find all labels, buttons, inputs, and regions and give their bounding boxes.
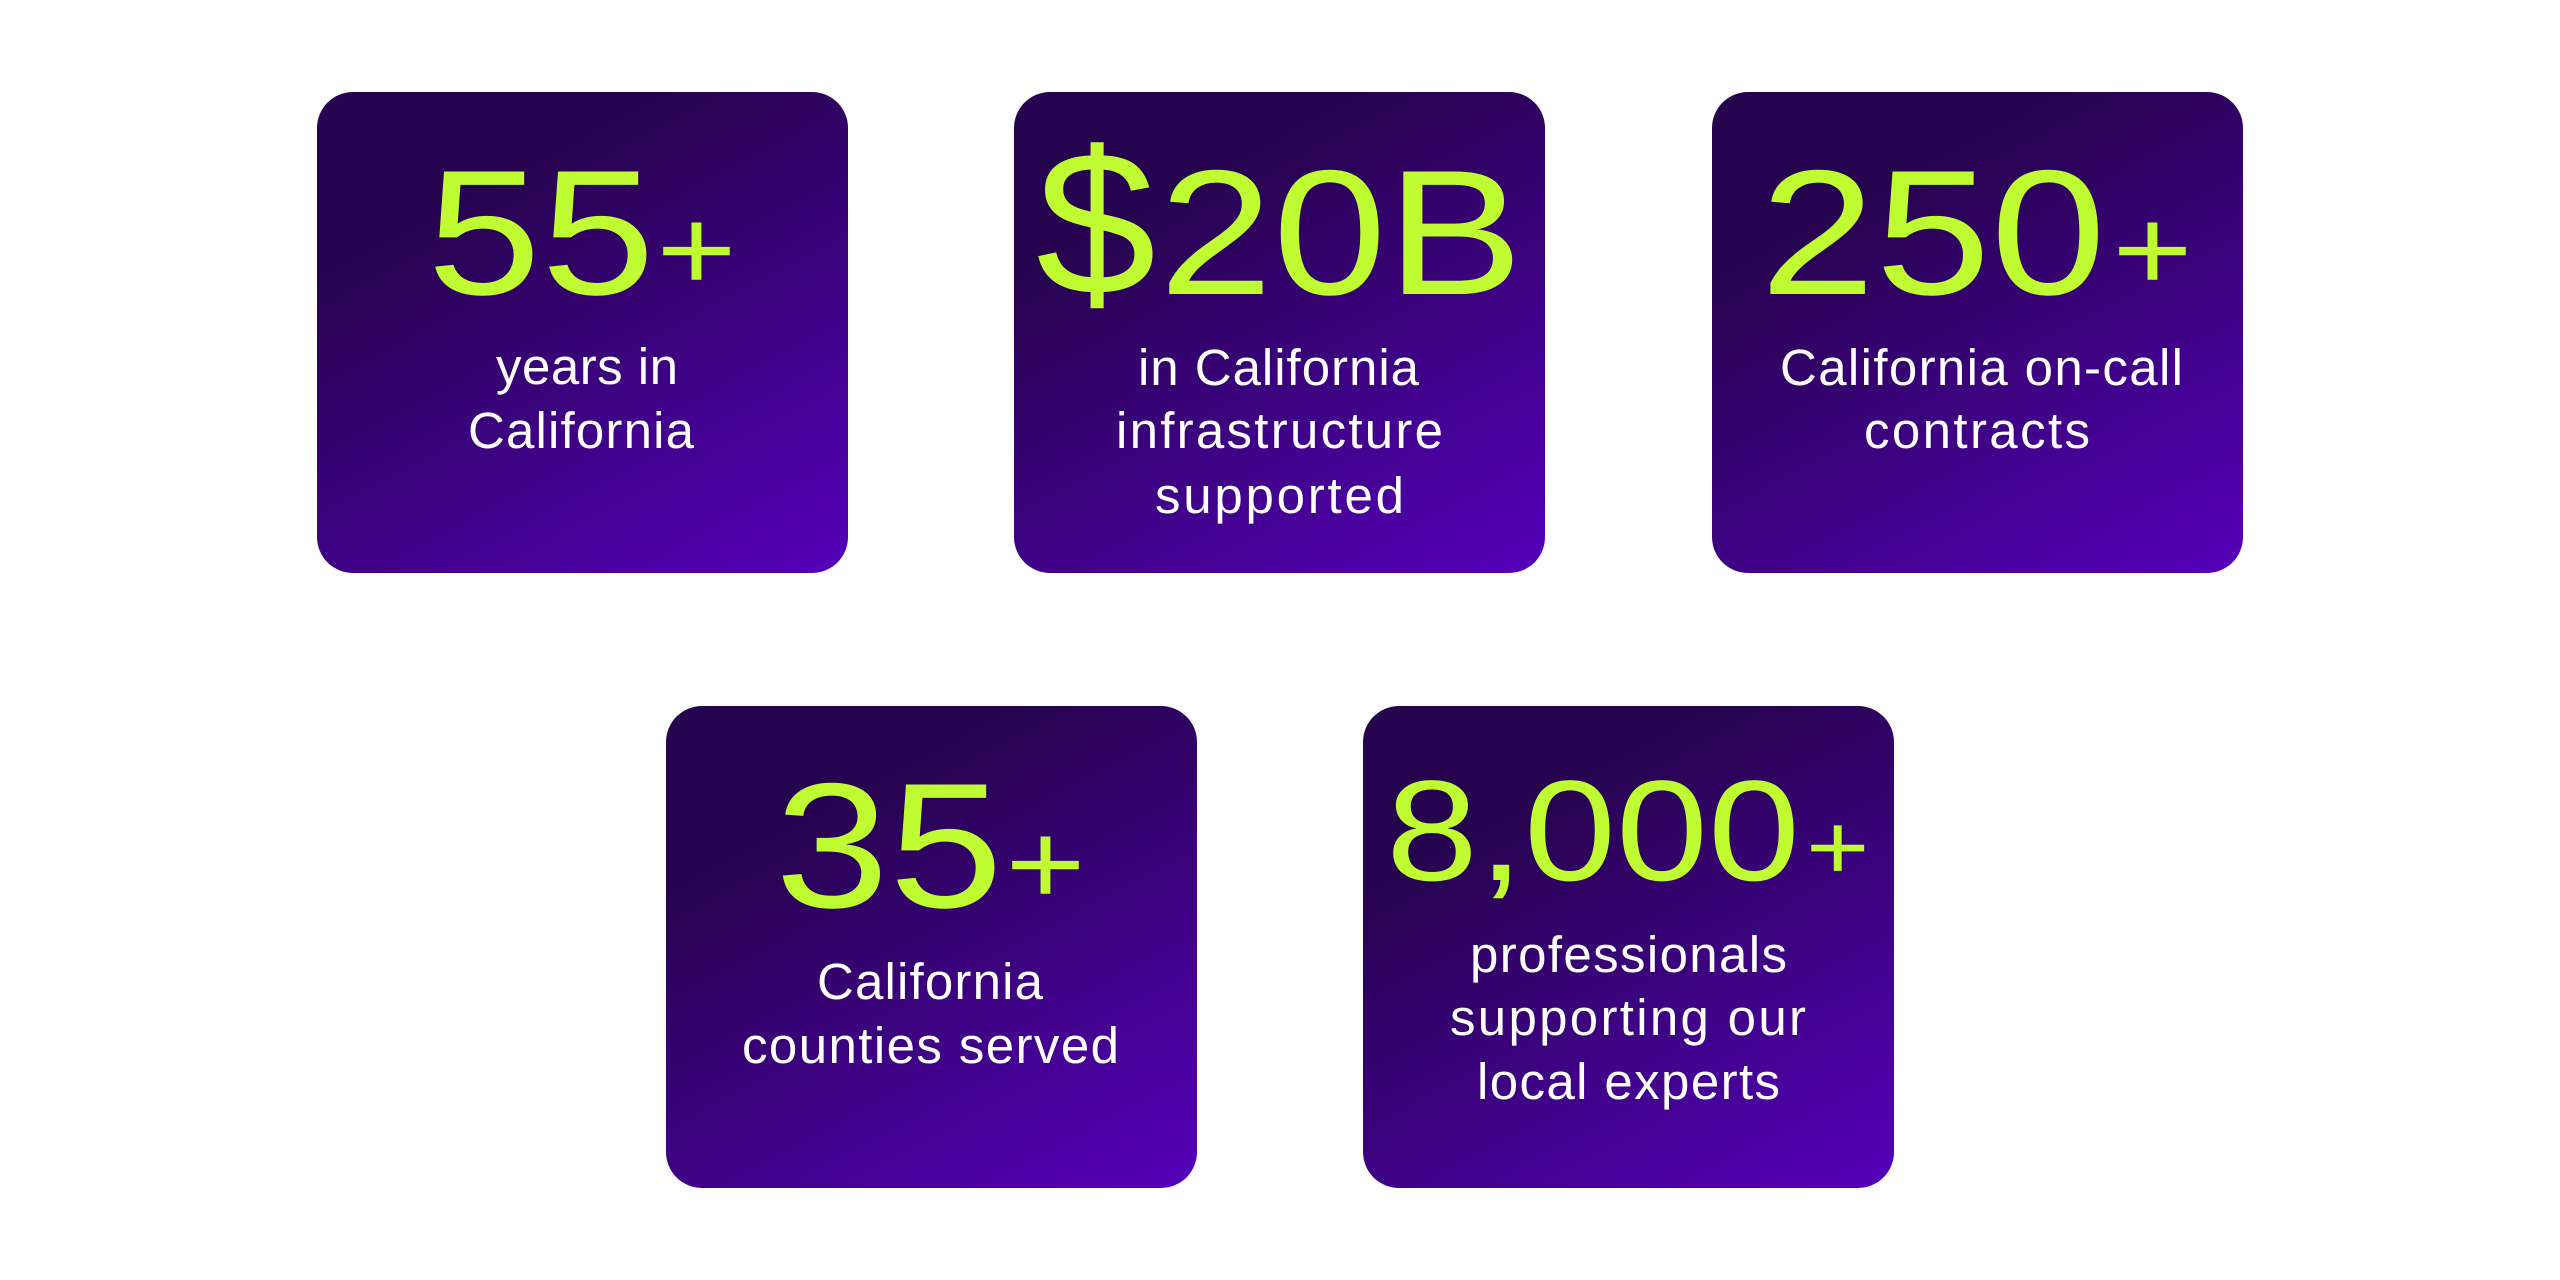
label: professionals supporting our local experts: supporting our xyxy=(1450,989,1806,1046)
label: California counties served: counties served xyxy=(742,1017,1119,1074)
label: in California infrastructure supported: infrastructure xyxy=(1116,402,1443,459)
statistic: 250+: + xyxy=(2112,184,2192,315)
statistic: 8,000+: 8,000 xyxy=(1386,752,1800,911)
label: years in California: California xyxy=(468,402,695,459)
statistic: 35+ xyxy=(775,746,1086,945)
panel: 250+ on-call contracts xyxy=(1712,92,2243,573)
label: years in California: years in xyxy=(496,338,678,395)
label: California counties served xyxy=(742,953,1119,1074)
statistic: 35+: 35 xyxy=(775,746,1003,945)
panel: 55+ years in California xyxy=(317,92,848,573)
statistic: 55+ xyxy=(427,133,736,332)
statistic: 8,000+: + xyxy=(1806,795,1870,899)
label: California on-call contracts xyxy=(1780,339,2183,459)
statistic: $20B xyxy=(1036,109,1523,338)
statistic: $20B: $ xyxy=(1036,109,1156,338)
label: years in California xyxy=(468,338,695,459)
label: California on-call contracts: California on-call xyxy=(1780,339,2183,396)
panel: 35+ counties served xyxy=(666,706,1197,1188)
label: professionals supporting our local experts: professionals xyxy=(1470,926,1787,983)
statistic: 35+: + xyxy=(1006,798,1086,929)
label: California on-call contracts: contracts xyxy=(1864,402,2090,459)
label: professionals supporting our local experts: local experts xyxy=(1477,1053,1780,1110)
label: in California infrastructure supported: in California xyxy=(1138,339,1420,396)
statistic: 55+: 55 xyxy=(427,133,655,332)
panel: $20B infrastructure supported xyxy=(1014,92,1545,573)
label: in California infrastructure supported: supported xyxy=(1155,467,1404,524)
statistic: $20B: 20B xyxy=(1159,133,1523,332)
statistic: 55+: + xyxy=(656,184,736,315)
panel: 8,000+ professionals xyxy=(1363,706,1894,1188)
label: California counties served: California xyxy=(817,953,1044,1010)
statistic: 250+: 250 xyxy=(1760,133,2106,332)
label: in California infrastructure supported xyxy=(1116,339,1443,524)
label: professionals supporting our local experts xyxy=(1450,926,1806,1110)
statistic: 250+ xyxy=(1760,133,2192,332)
